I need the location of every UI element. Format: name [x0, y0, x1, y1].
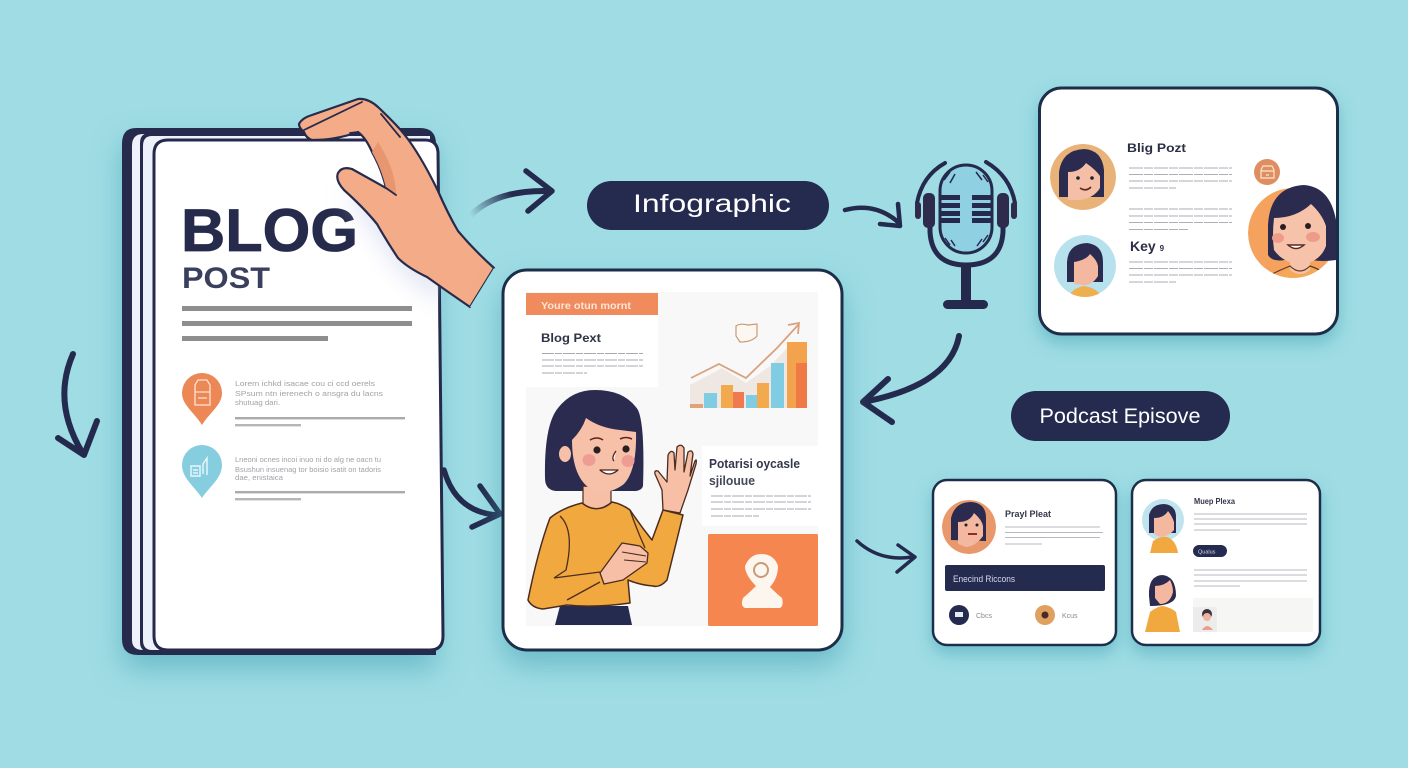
grille	[940, 195, 992, 223]
text card: Blog Post	[526, 315, 658, 387]
text block two: Bsushun insuenag tor boisio isatit on tadoris	[235, 465, 381, 474]
figure one	[1142, 499, 1184, 553]
orange tile with pin icon	[708, 534, 818, 626]
icon: microphone with headphones	[915, 162, 1017, 309]
title: Muep Plexa	[1194, 496, 1235, 506]
text block one: SPsum ntn ierenech o ansgra du lacns	[235, 389, 383, 398]
illustration: waving woman	[528, 390, 696, 625]
panel: centre infographic	[503, 270, 842, 650]
trend arrow	[691, 323, 799, 378]
text card: lower caption: sjilouue	[709, 473, 755, 488]
sweater	[528, 502, 683, 609]
skirt	[555, 606, 632, 625]
text lines	[1005, 527, 1103, 544]
panel: blog post document	[122, 128, 443, 655]
avatar one	[1050, 144, 1116, 210]
dark banner: Enecind Riccons	[953, 574, 1015, 585]
text card: lower caption: Potarisi oycasle	[709, 456, 800, 471]
icon: blue pin	[182, 445, 222, 498]
cheeks	[582, 454, 596, 466]
grey box with mini avatar	[1193, 598, 1313, 632]
panel: top right profile card	[1040, 88, 1338, 334]
title: Prayl Pleat	[1005, 509, 1052, 520]
text block one	[235, 379, 405, 426]
icon: orange circle with label: Kcus	[1062, 613, 1078, 620]
arrow: document to infographic pill	[470, 171, 552, 216]
lower hand fingers	[622, 552, 646, 562]
sweater folds	[554, 510, 645, 600]
text block one: shutuag dari.	[235, 398, 280, 407]
text block two: Lneoni ocnes incoi inuo ni do alg ne oacn tu	[235, 455, 381, 464]
small pill	[1193, 545, 1227, 557]
lower hand	[600, 543, 648, 584]
label pill: Infographic: Infographic	[633, 190, 791, 218]
label pill: Podcast Episode: Podcast Episove	[1040, 405, 1200, 428]
eyes and brows	[593, 446, 601, 454]
headband	[917, 162, 1015, 203]
title: Blog Post: Blig Pozt	[1127, 141, 1186, 155]
dark banner	[945, 565, 1105, 591]
ear cups	[915, 193, 1017, 228]
text card: Blog Post: Blog Pext	[541, 331, 601, 345]
small pill: Qualus	[1198, 550, 1216, 556]
ear	[559, 446, 571, 462]
neck	[583, 486, 611, 510]
back sheets of the document stack	[122, 128, 436, 655]
arrow: microphone to centre panel	[863, 336, 959, 422]
soft shadow under the hand	[345, 190, 445, 305]
text block one: Lorem ichkd isacae cou ci ccd oerels	[235, 379, 375, 388]
hair back	[545, 390, 643, 491]
raised hand	[655, 445, 696, 513]
face	[572, 418, 636, 492]
icon: dark circle with label	[949, 605, 992, 625]
label pill: Podcast Episode	[1011, 391, 1230, 441]
text lines	[1194, 514, 1307, 586]
label: Key: Key 9	[1130, 238, 1165, 254]
orange banner	[526, 293, 658, 315]
arrow: document to centre panel	[444, 470, 500, 527]
icon: dark circle with label: Cbcs	[976, 613, 992, 620]
icon: small orange badge	[1254, 159, 1280, 185]
orange banner: Youre otun mornt	[541, 300, 632, 312]
icon: orange pin	[182, 373, 222, 425]
text card: lower caption	[702, 446, 818, 526]
arrow: centre panel to small cards	[857, 541, 915, 572]
heading: BLOG: BLOG	[181, 197, 358, 264]
chart badge icon	[736, 324, 757, 342]
cradle and stand	[930, 227, 1003, 265]
text lines	[1129, 168, 1232, 282]
bar chart	[690, 323, 807, 408]
avatar	[942, 500, 996, 554]
heading: POST: POST	[182, 262, 270, 295]
front page	[154, 140, 443, 650]
arrow: pill to microphone	[845, 204, 900, 226]
avatar two	[1054, 235, 1116, 298]
panel: lower left card	[933, 480, 1116, 645]
summary lines	[182, 306, 412, 341]
nose and mouth	[600, 451, 618, 474]
inner content background	[526, 292, 818, 626]
icon: orange circle with label	[1035, 605, 1078, 625]
text block two: dae, enistaica	[235, 473, 283, 482]
grille ticks	[944, 172, 988, 246]
icon: hand holding the page	[299, 99, 500, 310]
arrow: left curved arrow down	[58, 354, 97, 455]
avatar three, large	[1248, 185, 1336, 278]
text block two	[235, 455, 405, 500]
panel: lower right card	[1132, 480, 1320, 645]
figure two	[1145, 575, 1180, 632]
label pill: Infographic	[587, 181, 829, 230]
